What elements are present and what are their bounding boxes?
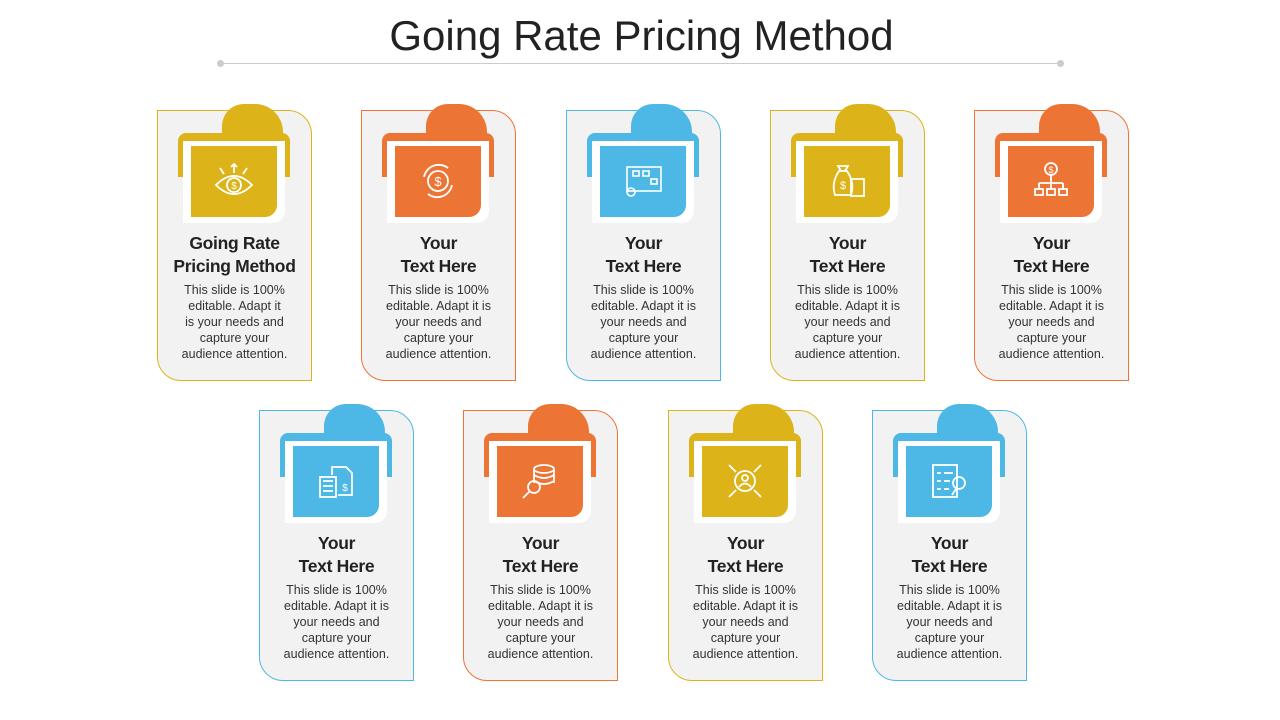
body: editable. Adapt it is — [591, 299, 696, 313]
body: This slide is 100% — [1001, 283, 1102, 297]
icon: calculator document: $ — [342, 483, 348, 494]
body: capture your — [813, 331, 882, 345]
icon: dollar cycle: $ — [434, 174, 442, 189]
heading: Text Here — [606, 256, 681, 276]
heading — [298, 533, 374, 576]
body: capture your — [915, 631, 984, 645]
body: editable. Adapt it is — [284, 599, 389, 613]
body — [795, 283, 900, 361]
body — [693, 583, 798, 661]
heading: Text Here — [1014, 256, 1089, 276]
icon: coins magnifier — [497, 446, 583, 517]
heading: Your — [420, 233, 457, 253]
card 4 — [770, 104, 925, 381]
body: your needs and — [906, 615, 993, 629]
body — [897, 583, 1002, 661]
body: audience attention. — [693, 647, 798, 661]
body: audience attention. — [284, 647, 389, 661]
heading — [810, 233, 885, 276]
card 1 — [157, 104, 312, 381]
card 9 — [872, 404, 1027, 681]
body: This slide is 100% — [899, 583, 1000, 597]
body: your needs and — [293, 615, 380, 629]
icon: person target — [702, 446, 788, 517]
heading: Your — [931, 533, 968, 553]
icon: blueprint — [600, 146, 686, 217]
heading: Your — [318, 533, 355, 553]
heading — [708, 533, 783, 576]
body: your needs and — [1008, 315, 1095, 329]
body: editable. Adapt it is — [488, 599, 593, 613]
body: audience attention. — [182, 347, 287, 361]
heading — [502, 533, 578, 576]
heading — [173, 233, 296, 276]
card 5 — [974, 104, 1129, 381]
body: is your needs and — [185, 315, 284, 329]
body — [284, 583, 389, 661]
body: audience attention. — [897, 647, 1002, 661]
body: This slide is 100% — [388, 283, 489, 297]
heading: Text Here — [708, 556, 783, 576]
body: This slide is 100% — [797, 283, 898, 297]
icon: dollar cycle — [395, 146, 481, 217]
body: audience attention. — [591, 347, 696, 361]
icon: checklist search — [906, 446, 992, 517]
heading: Text Here — [503, 556, 578, 576]
body: editable. Adapt it is — [999, 299, 1104, 313]
card 2 — [361, 104, 516, 381]
heading: Text Here — [299, 556, 374, 576]
body: audience attention. — [795, 347, 900, 361]
body: capture your — [711, 631, 780, 645]
heading: Your — [522, 533, 559, 553]
heading — [912, 533, 987, 576]
body — [488, 583, 593, 661]
icon: hierarchy dollar — [1008, 146, 1094, 217]
card 6 — [259, 404, 414, 681]
body: capture your — [506, 631, 575, 645]
body: capture your — [609, 331, 678, 345]
body: capture your — [404, 331, 473, 345]
body: This slide is 100% — [286, 583, 387, 597]
icon: money bag calculator — [804, 146, 890, 217]
body — [591, 283, 696, 361]
body: editable. Adapt it is — [693, 599, 798, 613]
body: This slide is 100% — [695, 583, 796, 597]
card 3 — [566, 104, 721, 381]
body: your needs and — [702, 615, 789, 629]
body: editable. Adapt it — [188, 299, 281, 313]
heading: Going Rate — [189, 233, 280, 253]
icon: calculator document — [293, 446, 379, 517]
body: your needs and — [804, 315, 891, 329]
card 8 — [668, 404, 823, 681]
icon: money bag calculator: $ — [840, 180, 846, 192]
heading — [400, 233, 476, 276]
body: editable. Adapt it is — [795, 299, 900, 313]
body: your needs and — [497, 615, 584, 629]
title: Going Rate Pricing Method — [389, 12, 894, 59]
heading: Pricing Method — [173, 256, 296, 276]
body: capture your — [302, 631, 371, 645]
icon: eye dollar — [191, 146, 277, 217]
body: This slide is 100% — [490, 583, 591, 597]
body: audience attention. — [488, 647, 593, 661]
body: editable. Adapt it is — [897, 599, 1002, 613]
icon: eye dollar: $ — [231, 181, 237, 192]
body — [386, 283, 491, 361]
body: your needs and — [395, 315, 482, 329]
title underline — [217, 60, 1064, 67]
body: This slide is 100% — [593, 283, 694, 297]
heading — [606, 233, 681, 276]
card 7 — [463, 404, 618, 681]
heading: Text Here — [401, 256, 476, 276]
heading: Your — [727, 533, 764, 553]
body: your needs and — [600, 315, 687, 329]
heading: Your — [829, 233, 866, 253]
body: capture your — [1017, 331, 1086, 345]
heading: Your — [1033, 233, 1070, 253]
body: capture your — [200, 331, 269, 345]
heading: Text Here — [912, 556, 987, 576]
heading — [1014, 233, 1089, 276]
body: audience attention. — [999, 347, 1104, 361]
body — [999, 283, 1104, 361]
body: editable. Adapt it is — [386, 299, 491, 313]
icon: hierarchy dollar: $ — [1048, 165, 1054, 175]
body: audience attention. — [386, 347, 491, 361]
body: This slide is 100% — [184, 283, 285, 297]
body — [182, 283, 287, 361]
heading: Text Here — [810, 256, 885, 276]
heading: Your — [625, 233, 662, 253]
